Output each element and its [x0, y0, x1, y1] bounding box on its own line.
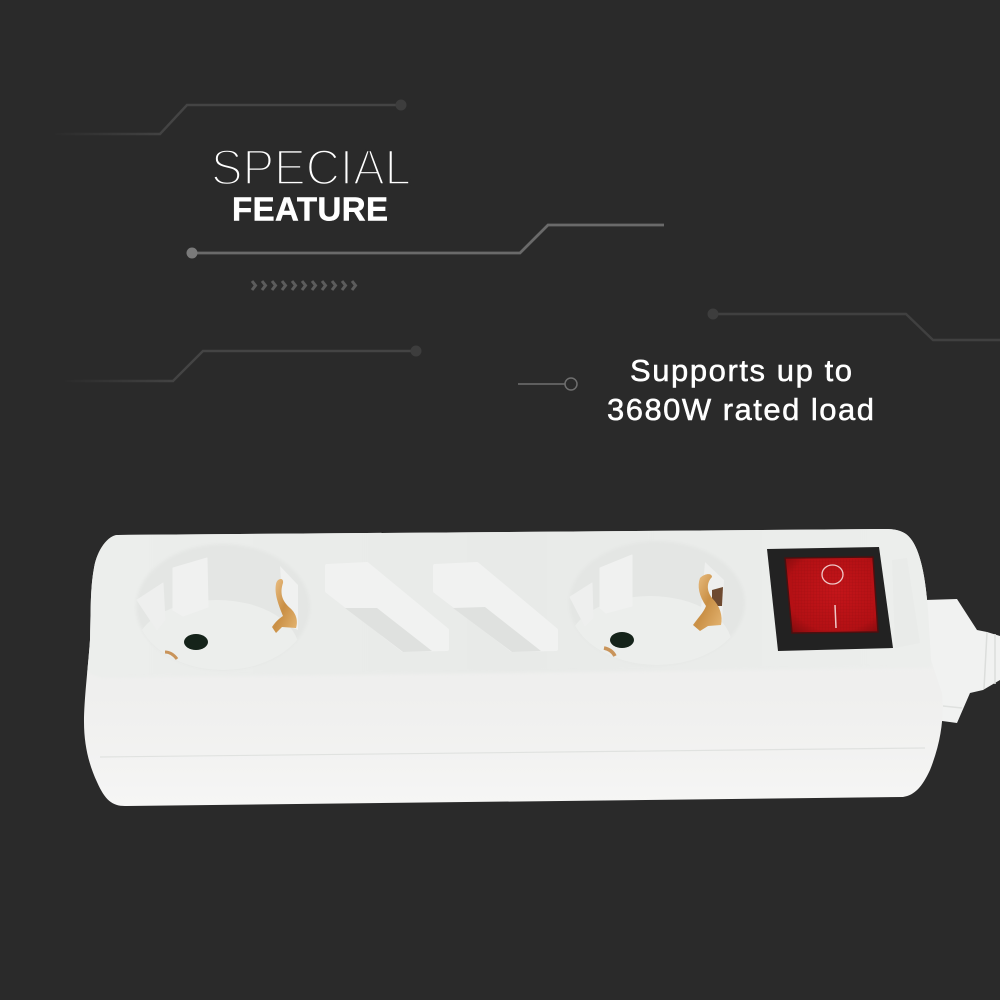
- circuit line: under heading: [186, 225, 664, 258]
- rocker texture: [790, 559, 875, 631]
- connector marker: [518, 378, 577, 390]
- contact notch: [280, 566, 298, 630]
- strip body: [84, 529, 943, 806]
- circuit line: right: [708, 308, 1000, 340]
- power strip: [80, 525, 1000, 806]
- contact notch: [700, 562, 724, 625]
- earth tab top: [600, 555, 632, 613]
- callout line 1: Supports up to: [630, 353, 852, 388]
- slot right: [435, 564, 556, 652]
- slot floor: [453, 607, 541, 652]
- socket floor: [568, 596, 732, 696]
- earth tab left: [137, 583, 165, 630]
- metal contact: [272, 579, 297, 633]
- earth tab top: [173, 558, 208, 616]
- embossed rating panel: [892, 558, 920, 648]
- red rocker: [785, 557, 878, 633]
- circuit line: middle left: [65, 346, 422, 381]
- chevron row: [252, 281, 356, 290]
- lower metal contact: [165, 652, 177, 659]
- switch frame: [767, 547, 893, 651]
- off symbol: [822, 565, 843, 584]
- callout text: [607, 353, 874, 427]
- pin hole: [184, 634, 208, 650]
- pin hole: [610, 632, 634, 648]
- housing seam: [100, 748, 925, 757]
- circuit line: top left: [55, 100, 406, 134]
- heading: [211, 140, 411, 228]
- rocker switch: [767, 547, 893, 651]
- power cord plug: [925, 599, 1000, 723]
- strip top face: [80, 525, 935, 678]
- callout line 2: 3680W rated load: [607, 392, 874, 427]
- on symbol: [835, 605, 836, 628]
- socket floor: [135, 600, 299, 700]
- heading line: SPECIAL: SPECIAL: [211, 140, 411, 196]
- slot floor: [345, 608, 432, 652]
- earth tab left: [570, 583, 593, 626]
- socket right: [604, 574, 723, 657]
- lower metal contact: [604, 648, 615, 656]
- slot left: [327, 564, 447, 652]
- socket left: [165, 579, 297, 660]
- heading line: FEATURE: FEATURE: [232, 190, 388, 228]
- metal contact: [693, 574, 722, 631]
